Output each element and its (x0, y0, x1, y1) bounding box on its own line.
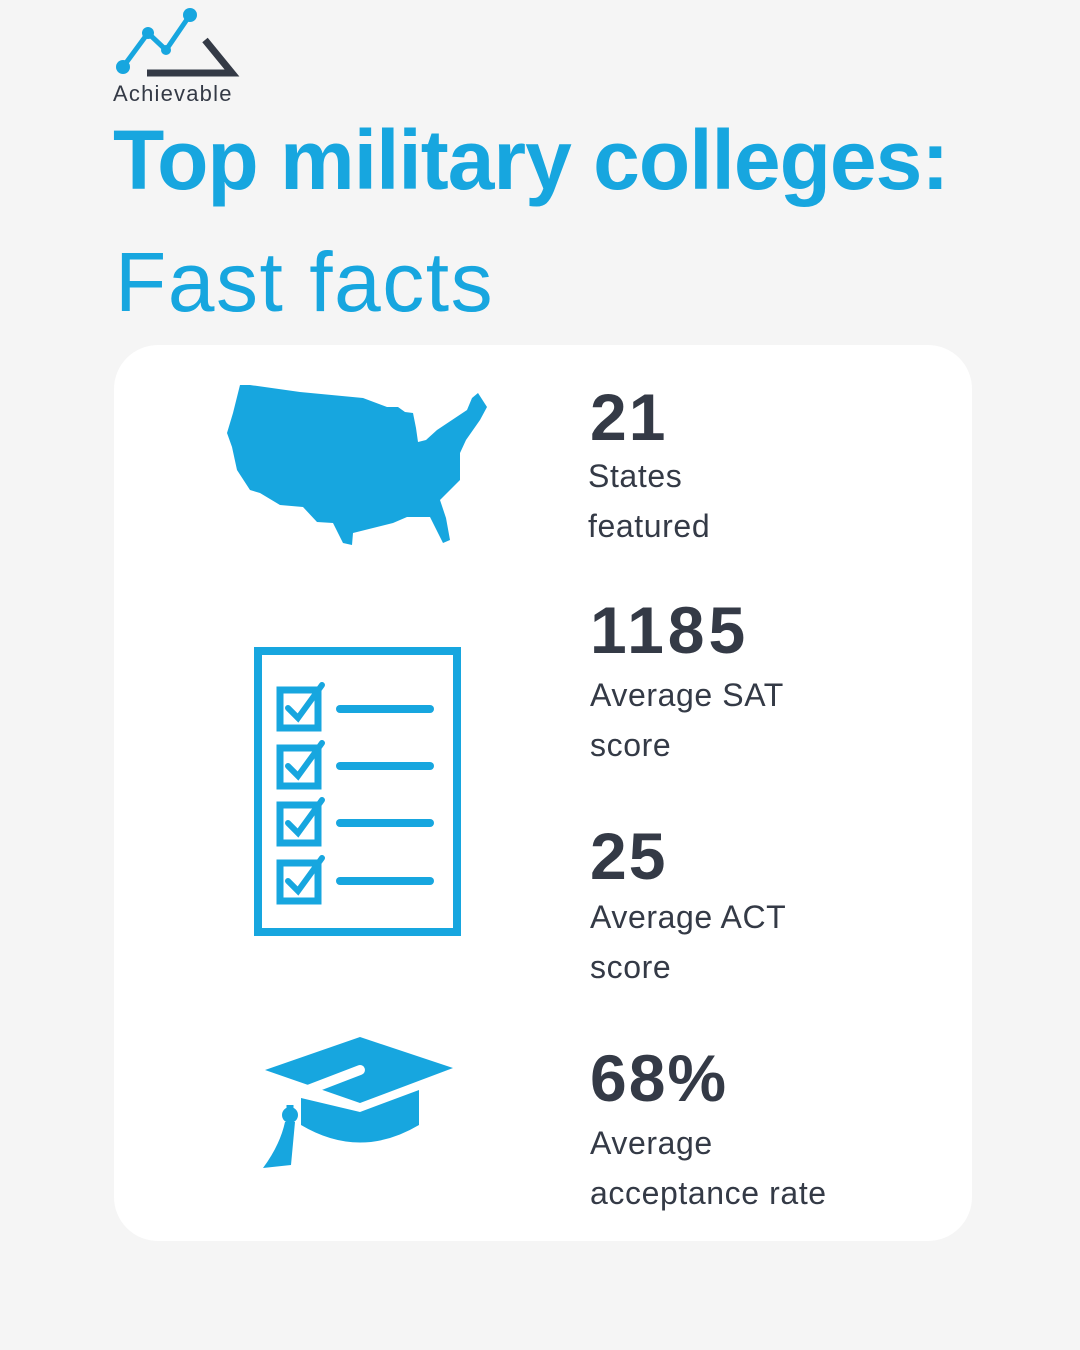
icon: checklist (254, 647, 461, 936)
text: score (590, 727, 671, 763)
stat: states: 21 (590, 380, 667, 454)
text: featured (588, 508, 710, 544)
panel: facts card (114, 345, 972, 1241)
stat: acceptance: 68% (590, 1041, 728, 1115)
text: Average ACT (590, 899, 786, 935)
text: Average (590, 1125, 713, 1161)
logo: Achievable (113, 81, 233, 106)
stat: ACT: 25 (590, 819, 667, 893)
text: acceptance rate (590, 1175, 827, 1211)
subtitle: Fast facts (115, 235, 494, 329)
title: Top military colleges: (113, 113, 948, 207)
text: score (590, 949, 671, 985)
logo (113, 8, 240, 106)
stat: SAT: 1185 (590, 593, 749, 667)
text: States (588, 458, 682, 494)
icon: graduation cap (263, 1037, 453, 1168)
text: Average SAT (590, 677, 784, 713)
